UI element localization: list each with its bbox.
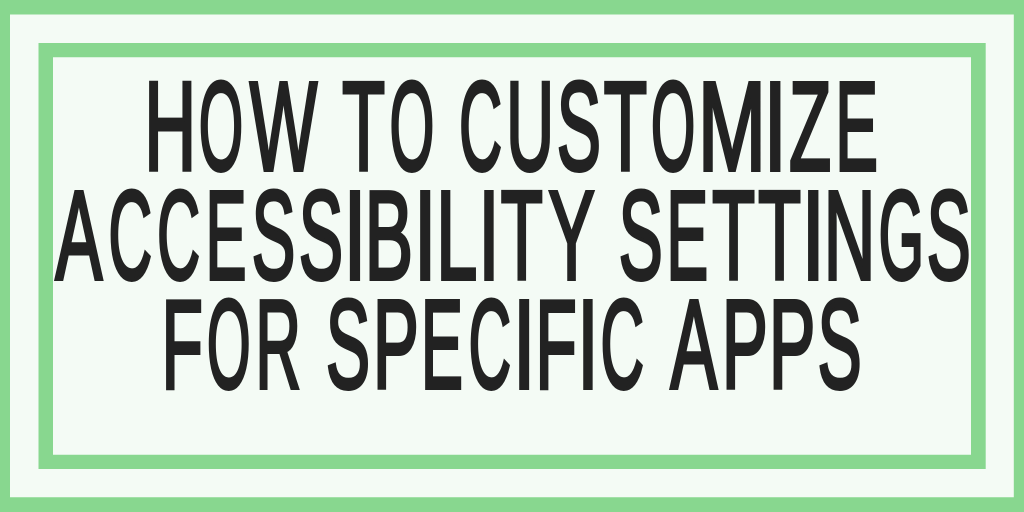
title line 1: S	[557, 56, 601, 197]
title line 2: S	[927, 165, 971, 306]
title line 2: I	[414, 165, 436, 306]
title line 3: P	[769, 274, 815, 415]
title line 1: C	[459, 56, 502, 197]
title line 3: I	[578, 274, 598, 415]
title line 3: C	[469, 274, 511, 415]
title line 1: T	[604, 56, 647, 197]
title line 2: A	[56, 165, 102, 306]
title line 2: L	[436, 165, 477, 306]
title line 1: O	[651, 56, 695, 197]
title line 2: S	[619, 165, 663, 306]
title line 2: T	[501, 165, 543, 306]
title line 1: M	[698, 56, 766, 197]
inner green frame	[38, 43, 986, 469]
title line 2: I	[344, 165, 366, 306]
title line 1: H	[144, 56, 196, 197]
title line 3: E	[421, 274, 463, 415]
title line 2: E	[666, 165, 708, 306]
title line 2: I	[802, 165, 825, 306]
title line 3: P	[722, 274, 768, 415]
title line 3: R	[256, 274, 301, 415]
title line 1: U	[506, 56, 554, 197]
title line 2: C	[157, 165, 200, 306]
title line 2: S	[299, 165, 343, 306]
title line 3: A	[670, 274, 717, 415]
title line 3: C	[600, 274, 644, 415]
title line 1: I	[764, 56, 787, 197]
title line 2: C	[108, 165, 152, 306]
title line 2: I	[478, 165, 499, 306]
title line 1: Z	[789, 56, 831, 197]
title line 1: T	[342, 56, 385, 197]
title line 3: O	[207, 274, 250, 415]
title line 3: I	[513, 274, 535, 415]
title line 1: E	[835, 56, 878, 197]
title line 3: F	[162, 274, 203, 415]
title line 1: W	[250, 56, 317, 197]
title line 2: S	[252, 165, 295, 306]
title line 2: T	[758, 165, 801, 306]
title line 2: G	[879, 165, 924, 306]
title line 2: E	[206, 165, 246, 306]
title	[56, 56, 971, 415]
title line 3: F	[536, 274, 577, 415]
title line 2: B	[365, 165, 413, 306]
title line 3: S	[818, 274, 862, 415]
title line 1: O	[390, 56, 434, 197]
title line 3: P	[373, 274, 419, 415]
title line 2: Y	[548, 165, 594, 306]
title line 2: N	[824, 165, 875, 306]
title line 2: T	[712, 165, 755, 306]
title line 1: O	[199, 56, 243, 197]
title line 3: S	[326, 274, 370, 415]
